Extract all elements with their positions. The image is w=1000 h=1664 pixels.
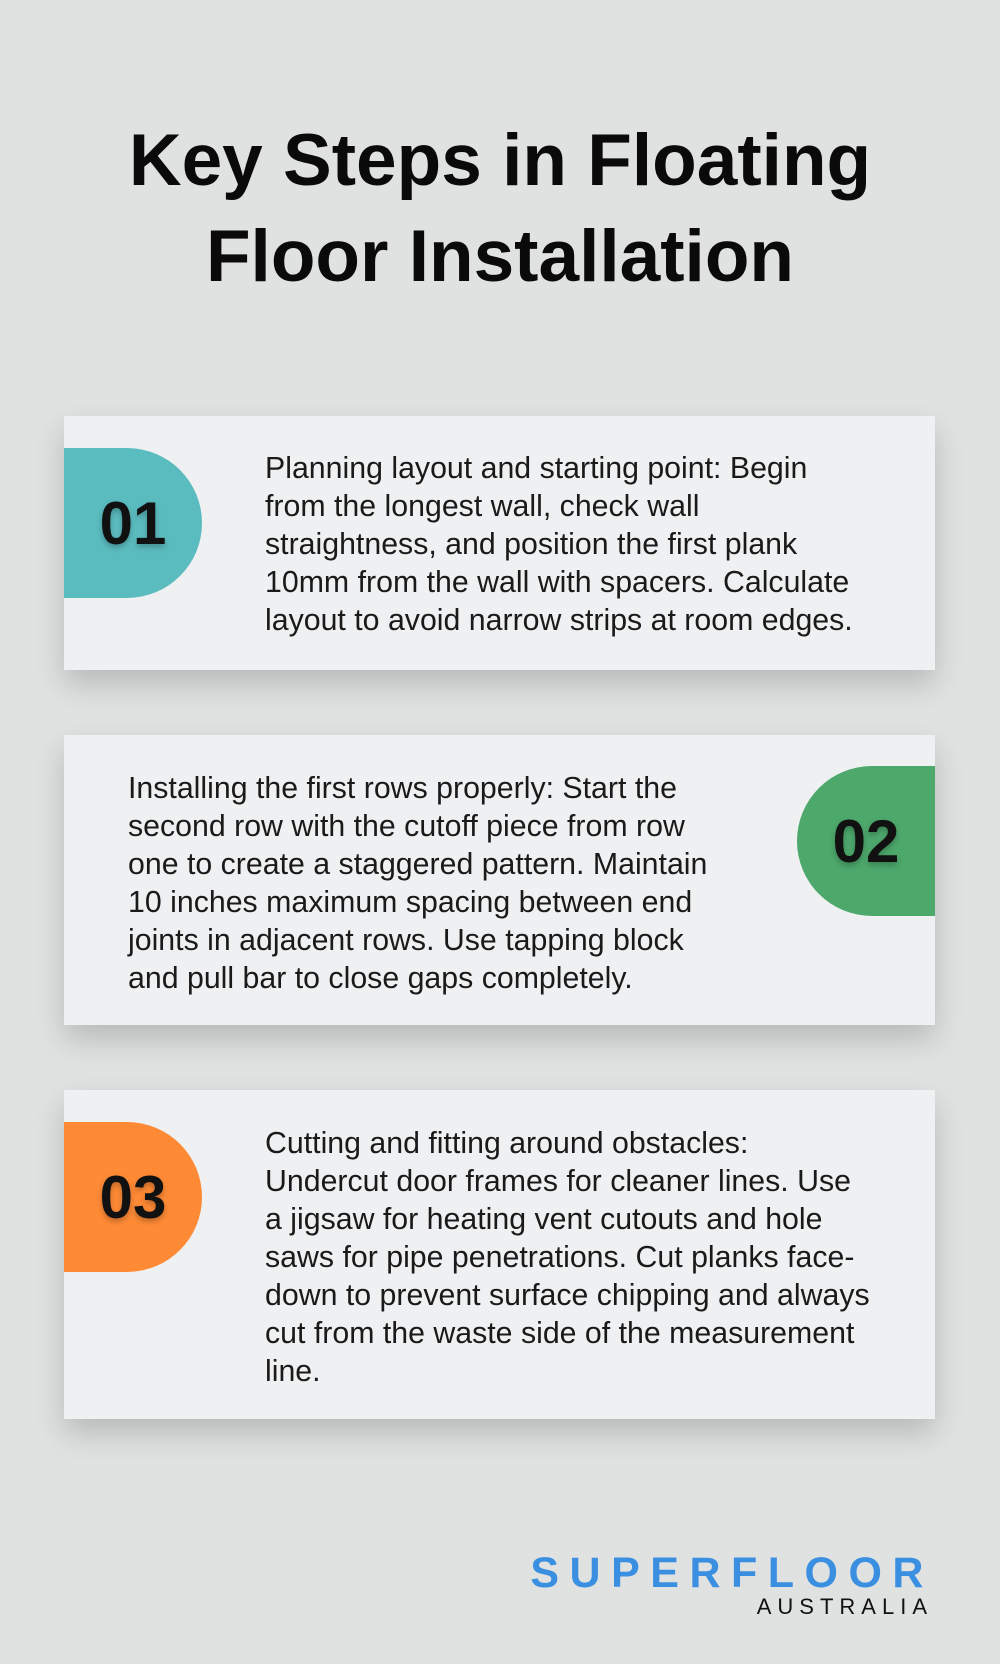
text step 1: Planning layout and starting point: Begin <box>265 452 807 485</box>
text step 3: line. <box>265 1355 321 1388</box>
logo <box>530 1549 934 1619</box>
text step 1 <box>265 452 853 637</box>
logo: SUPERFLOOR <box>530 1549 934 1597</box>
text step 3: saws for pipe penetrations. Cut planks face- <box>265 1241 854 1274</box>
text step 2: one to create a staggered pattern. Maintain <box>128 848 707 881</box>
panel: step 3 <box>64 1090 935 1419</box>
badge 03: 03 <box>100 1164 166 1230</box>
title: Key Steps in Floating <box>129 120 871 201</box>
text step 2: Installing the first rows properly: Start the <box>128 772 677 805</box>
text step 2: second row with the cutoff piece from row <box>128 810 685 843</box>
panel: step 2 <box>64 735 935 1025</box>
title: Floor Installation <box>206 216 794 297</box>
text step 2: joints in adjacent rows. Use tapping block <box>128 924 684 957</box>
text step 2: and pull bar to close gaps completely. <box>128 962 633 995</box>
badge 02 <box>797 766 935 916</box>
text step 2: 10 inches maximum spacing between end <box>128 886 692 919</box>
text step 1: straightness, and position the first plank <box>265 528 797 561</box>
text step 3 <box>265 1127 870 1388</box>
badge 03 <box>64 1122 202 1272</box>
panel: step 1 <box>64 416 935 670</box>
logo: AUSTRALIA <box>757 1594 933 1619</box>
title <box>129 120 871 297</box>
text step 3: cut from the waste side of the measurement <box>265 1317 854 1350</box>
text step 1: layout to avoid narrow strips at room edges. <box>265 604 853 637</box>
badge 01: 01 <box>100 490 166 556</box>
text step 1: 10mm from the wall with spacers. Calculate <box>265 566 849 599</box>
badge 02: 02 <box>833 808 899 874</box>
badge 01 <box>64 448 202 598</box>
text step 3: Undercut door frames for cleaner lines. Use <box>265 1165 851 1198</box>
text step 3: Cutting and fitting around obstacles: <box>265 1127 748 1160</box>
text step 1: from the longest wall, check wall <box>265 490 699 523</box>
text step 3: a jigsaw for heating vent cutouts and hole <box>265 1203 822 1236</box>
text step 2 <box>127 772 707 995</box>
text step 3: down to prevent surface chipping and always <box>265 1279 870 1312</box>
